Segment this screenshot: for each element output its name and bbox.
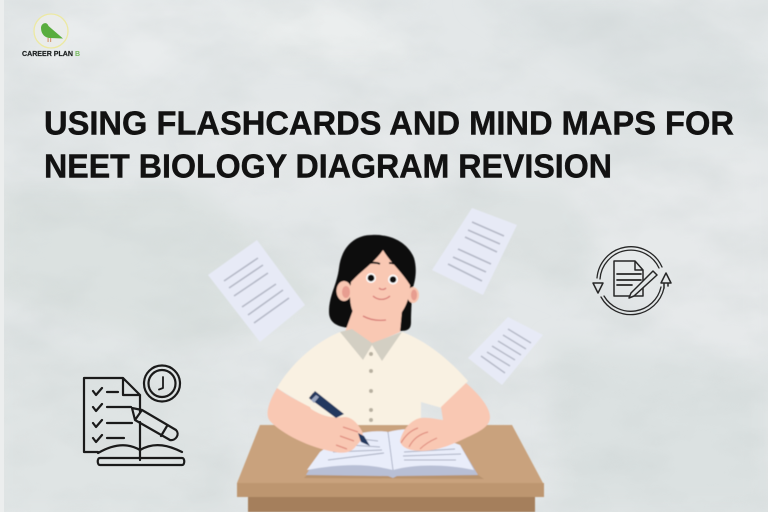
ear right — [407, 287, 419, 303]
title: NEET BIOLOGY DIAGRAM REVISION — [44, 148, 612, 186]
neck — [345, 310, 402, 344]
neck line — [363, 316, 386, 320]
logo text: CAREER PLAN — [22, 51, 73, 58]
arms and hands — [268, 383, 490, 453]
document — [614, 261, 643, 296]
logo letter B: B — [75, 51, 80, 58]
logo bird — [41, 23, 63, 42]
logo ring — [34, 14, 68, 48]
face — [350, 250, 410, 322]
student illustration — [237, 235, 544, 512]
collar — [340, 329, 402, 361]
book — [306, 429, 478, 478]
floating paper: top right — [432, 208, 517, 295]
finger lines — [336, 427, 437, 449]
nose and mouth — [373, 288, 390, 299]
desk — [237, 425, 544, 512]
logo: Career Plan B — [22, 14, 80, 58]
open book base — [98, 445, 184, 465]
shirt — [277, 332, 468, 426]
floating paper: lower right — [468, 317, 543, 385]
pencil — [132, 408, 178, 440]
icon: revision cycle document — [593, 247, 671, 315]
pen — [629, 271, 657, 298]
cycle arcs — [597, 247, 662, 279]
title — [44, 106, 734, 186]
document with checklist — [84, 378, 140, 460]
pen — [309, 391, 370, 446]
hair — [329, 235, 416, 331]
floating paper: left — [208, 240, 305, 342]
eyes — [366, 273, 398, 284]
icon: checklist, clock and pencil — [84, 366, 184, 465]
shirt buttons — [369, 352, 373, 422]
cycle arrowheads — [593, 283, 603, 293]
ear left — [336, 281, 352, 301]
title: USING FLASHCARDS AND MIND MAPS FOR — [44, 106, 734, 142]
eyebrows — [362, 263, 406, 271]
clock — [144, 366, 180, 402]
